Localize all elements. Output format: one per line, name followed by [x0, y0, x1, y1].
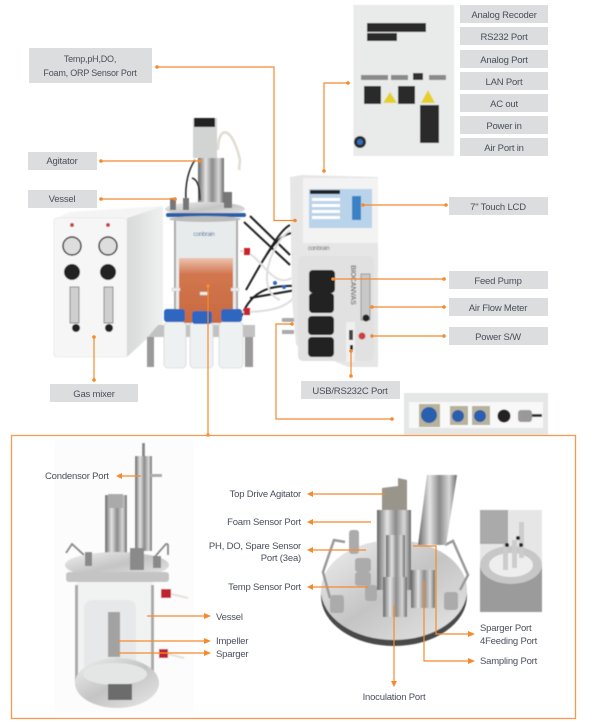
- text: Sparger / Feeding Port: 4Feeding Port: [480, 636, 538, 647]
- text: Sparger / Feeding Port: [480, 623, 538, 647]
- callouts left vessel: [45, 471, 248, 660]
- rods: [75, 585, 154, 685]
- liquid: [179, 258, 233, 323]
- top red markers: [70, 223, 110, 227]
- text: Impeller: Impeller: [216, 636, 248, 647]
- text: Sparger: Sparger: [216, 649, 248, 660]
- label: Gas mixer: Gas mixer: [73, 389, 115, 400]
- tubing: [240, 216, 296, 320]
- pressure gauges: [63, 237, 117, 255]
- drive stack: [105, 495, 127, 570]
- label: RS232 Port: [460, 27, 548, 45]
- label: USB port: [301, 381, 400, 399]
- text: Condensor Port: Condensor Port: [45, 471, 109, 482]
- arrow: inoculation: [391, 605, 397, 687]
- lid: [165, 202, 245, 216]
- air flow meter: [361, 274, 370, 322]
- text: Sparger / Feeding Port: Sparger Port: [480, 623, 532, 634]
- label: Air Flow Meter: Air Flow Meter: [469, 303, 527, 314]
- power switch: [358, 332, 366, 340]
- bottle filters: [172, 288, 239, 295]
- terminal blocks: [367, 23, 426, 41]
- photo: controller: [282, 175, 378, 367]
- photo: head plate: [321, 475, 468, 646]
- label: Analog Recoder: Analog Recoder: [471, 10, 537, 21]
- text: Top Drive Agitator: Top Drive Agitator: [230, 489, 301, 500]
- black cables: [186, 160, 200, 200]
- sampling port: [411, 570, 435, 608]
- BIOCANVAS: BIOCANVAS: [349, 265, 356, 305]
- label: Agitator: Agitator: [46, 156, 78, 167]
- photo: inset ports: [480, 510, 542, 612]
- label: 7 inch LCD: [449, 197, 548, 215]
- label: Power in: Power in: [486, 121, 522, 132]
- label: Air Port in: Air Port in: [484, 143, 524, 154]
- text: PH DO Spare: [209, 541, 301, 564]
- text: PH DO Spare: Port (3ea): [261, 553, 301, 564]
- photo: bioreactor: [147, 118, 296, 368]
- label: Temp sensor port: Foam, ORP Sensor Port: [43, 68, 137, 78]
- arrow: temp: [307, 584, 368, 590]
- label: Feed Pump: [449, 271, 548, 289]
- vessel rods: [174, 220, 238, 310]
- label: Vessel: Vessel: [49, 194, 75, 205]
- knobs: [64, 264, 116, 280]
- label: USB port: USB/RS232C Port: [312, 386, 388, 397]
- power inlet: [420, 105, 439, 143]
- serial ports: [361, 73, 446, 80]
- arrow: sparger: [118, 650, 211, 656]
- arrow: vessel: [147, 613, 211, 619]
- label: 7 inch LCD: 7" Touch LCD: [470, 202, 526, 213]
- lower body: [298, 256, 374, 361]
- brand text: conbrain: [193, 232, 215, 238]
- text: Temp Sensor Port: Temp Sensor Port: [228, 582, 302, 593]
- text: Foam Sensor Port: Foam Sensor Port: [227, 517, 302, 528]
- photo: gas mixer: [54, 206, 163, 357]
- photo: assembled vessel: [55, 440, 193, 712]
- callouts head plate: [209, 489, 538, 703]
- label: Power S/W: [449, 327, 548, 345]
- label: Gas mixer: [50, 384, 138, 402]
- text: PH DO Spare: PH, DO, Spare Sensor: [209, 541, 301, 552]
- text: Sampling Port: Sampling Port: [480, 656, 538, 667]
- label: AC out: AC out: [490, 99, 518, 110]
- arrow: top drive: [307, 491, 385, 497]
- brand text: conbrain: [308, 246, 329, 252]
- label: Power S/W: Power S/W: [475, 332, 521, 343]
- label: Air Flow Meter: [449, 298, 548, 316]
- label: Analog Recoder: [460, 5, 548, 23]
- AC outlets: [364, 86, 415, 104]
- vessel glass: [174, 220, 238, 325]
- motor: [193, 118, 217, 158]
- label: Feed Pump: Feed Pump: [474, 276, 522, 287]
- gas fittings: [282, 318, 294, 334]
- condenser: [135, 456, 152, 551]
- bottle caps: [164, 309, 242, 324]
- glass body: [77, 582, 153, 680]
- base: [75, 658, 159, 708]
- flowmeters: [70, 287, 113, 323]
- label: Power in: [460, 116, 548, 134]
- label: Temp sensor port: [29, 48, 152, 83]
- condenser tube: [418, 475, 457, 545]
- touch screen: [309, 189, 372, 228]
- photo: connector strip: [404, 393, 548, 435]
- label: AC out: [460, 94, 548, 112]
- text: Inoculation Port: Inoculation Port: [363, 692, 426, 703]
- label: Analog Port: Analog Port: [480, 55, 528, 66]
- USB area: [346, 322, 355, 362]
- label: LAN Port: LAN Port: [486, 77, 523, 88]
- sensor caps: [330, 530, 458, 613]
- photo: rear panel: [354, 5, 454, 156]
- stand: [147, 325, 255, 367]
- handles: [66, 544, 168, 560]
- white air tube: [218, 132, 240, 170]
- lid: [65, 552, 169, 578]
- arrow: sampling port: [424, 581, 475, 664]
- warning triangles: [383, 90, 435, 103]
- red caps: [159, 589, 171, 658]
- arrow: condensor: [116, 473, 141, 479]
- blue connectors: [273, 281, 286, 289]
- handles: [323, 540, 468, 598]
- top drive port: [377, 510, 411, 590]
- label: Vessel: [28, 190, 97, 208]
- label: Agitator: [28, 152, 97, 170]
- drive column: [198, 158, 224, 204]
- label: LAN Port: [460, 72, 548, 90]
- label: Air Port in: [460, 138, 548, 156]
- air port: [354, 136, 366, 148]
- arrow: foam: [307, 519, 371, 525]
- panel: vessel details: [12, 436, 576, 718]
- arrow: pH: [307, 547, 366, 553]
- label: Analog Port: [460, 50, 548, 68]
- arrow: impeller: [118, 638, 211, 644]
- arrow: sparger port: [413, 546, 475, 637]
- label: Temp sensor port: Temp,pH,DO,: [64, 54, 116, 64]
- peristaltic pumps: [308, 270, 335, 357]
- label: RS232 Port: RS232 Port: [480, 32, 528, 43]
- text: Vessel: Vessel: [216, 612, 243, 623]
- inoculation port: [386, 535, 405, 577]
- bottles: [164, 322, 243, 368]
- red fittings: [244, 248, 250, 315]
- leader lines upper: [92, 65, 448, 437]
